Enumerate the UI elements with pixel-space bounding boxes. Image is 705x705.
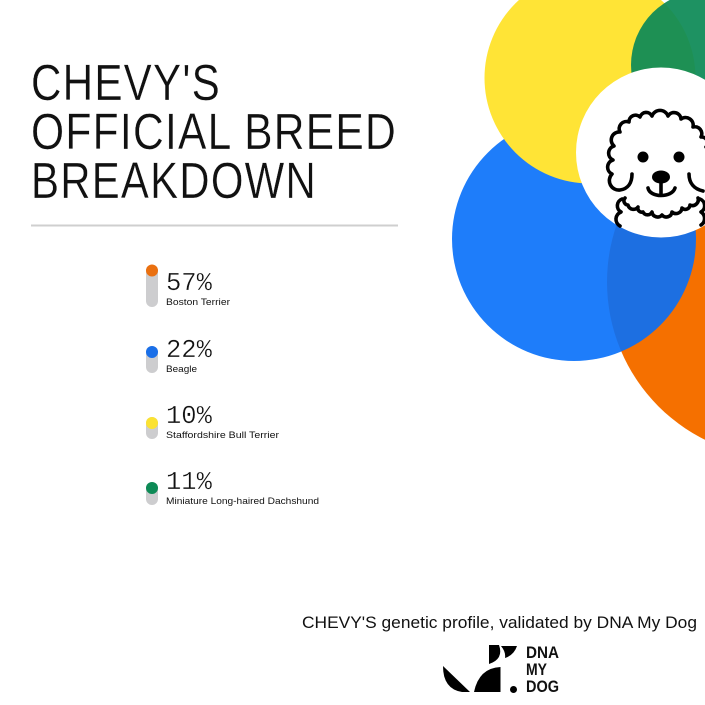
- breed item: Staffordshire Bull Terrier: [146, 402, 279, 440]
- breed name: Miniature Long-haired Dachshund: [166, 496, 319, 506]
- pill indicator: [146, 264, 158, 307]
- logo wordmark: DNA: [526, 643, 559, 662]
- logo wordmark: DOG: [526, 677, 559, 696]
- circle: orange: [607, 106, 705, 458]
- circle: yellow: [484, 0, 696, 184]
- icon: dog face: [608, 110, 705, 226]
- percentage: 57%: [166, 269, 213, 298]
- percentage: 10%: [166, 402, 213, 431]
- caption: CHEVY'S genetic profile, validated by DNA My Dog: [302, 614, 697, 632]
- title: OFFICIAL BREED: [31, 103, 397, 160]
- pill indicator: [146, 482, 158, 505]
- title: [31, 54, 397, 209]
- percentage: 22%: [166, 336, 213, 365]
- logo: DNA My Dog: [443, 643, 559, 696]
- circle: green: [631, 0, 705, 139]
- logo mark: [443, 645, 517, 693]
- breed item: Beagle: [146, 336, 213, 374]
- pill indicator: [146, 346, 158, 373]
- circle: white portrait: [576, 68, 705, 238]
- breed name: Staffordshire Bull Terrier: [166, 430, 279, 440]
- circle: blue: [452, 117, 696, 361]
- percentage: 11%: [166, 468, 213, 497]
- title: CHEVY'S: [31, 54, 221, 111]
- logo wordmark: [526, 643, 559, 696]
- breed item: Miniature Long-haired Dachshund: [146, 468, 319, 506]
- title: BREAKDOWN: [31, 152, 317, 209]
- divider: [31, 224, 398, 226]
- circle cluster: [452, 0, 705, 458]
- breed name: Beagle: [166, 364, 197, 374]
- pill indicator: [146, 417, 158, 439]
- breed item: Boston Terrier: [146, 264, 230, 307]
- logo wordmark: MY: [526, 660, 548, 679]
- breed name: Boston Terrier: [166, 297, 230, 307]
